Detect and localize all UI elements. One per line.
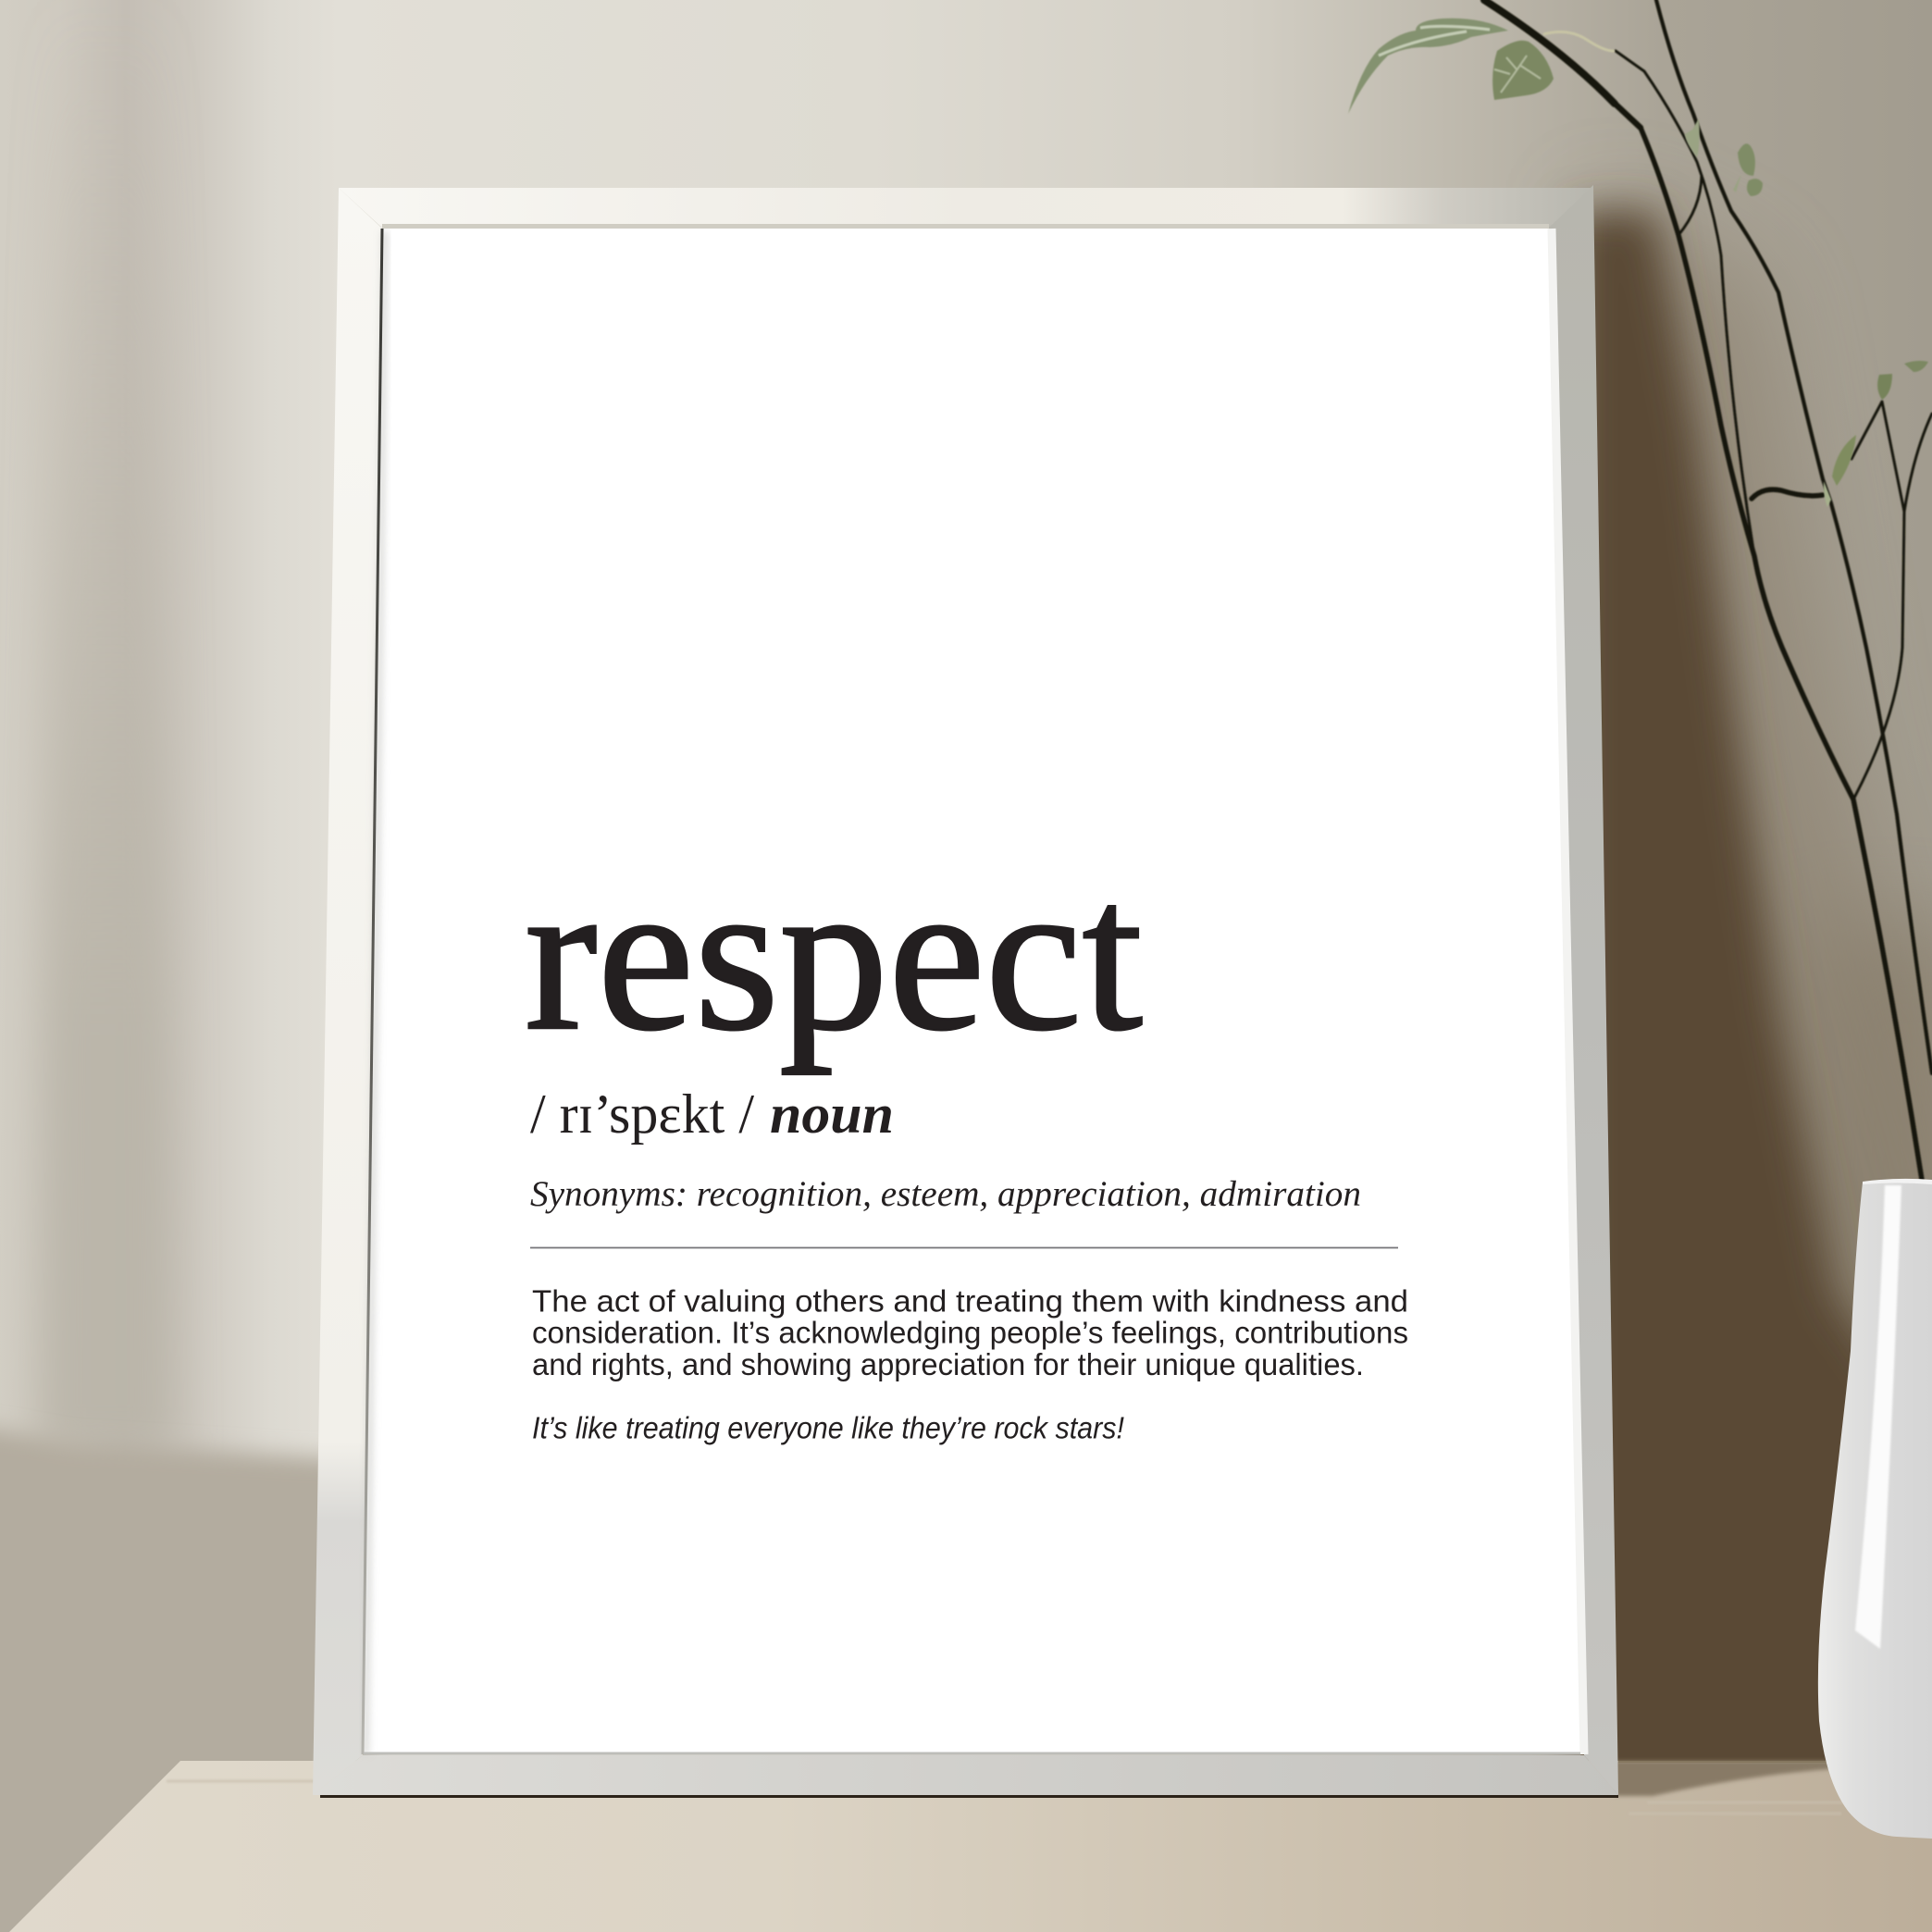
title: respect: respect [525,835,1143,1075]
frame: top bar [339,188,1593,228]
white vase [1818,1179,1932,1839]
part of speech: noun [770,1084,894,1145]
definition paragraph: The act of valuing others and treating them with kindness and [532,1284,1408,1318]
divider rule [530,1247,1398,1248]
definition paragraph [532,1284,1408,1381]
pale leaf stalk [1543,32,1615,51]
plant stems [1484,0,1932,1180]
frame: left bar [313,188,382,1795]
printed paper with text [362,229,1584,1754]
vase highlight [1855,1185,1901,1649]
white paper [362,229,1582,1754]
tabletop [9,1761,1932,1932]
pronunciation: / rɪ’spɛkt / [530,1084,754,1145]
definition paragraph: consideration. It’s acknowledging people’s feelings, contributions [532,1316,1408,1349]
twig leaves [1832,435,1856,486]
frame: bottom bar [313,1755,1618,1795]
plant leaves [1348,19,1928,507]
small pale leaf [1685,118,1700,157]
picture frame [313,185,1618,1798]
long trailing leaf [1348,19,1508,114]
frame contact shadow [320,1794,1618,1798]
vase body [1818,1180,1932,1839]
inner lip [382,224,1549,229]
synonyms: Synonyms: recognition, esteem, appreciation, admiration [530,1174,1361,1214]
italic tagline: It’s like treating everyone like they’re rock stars! [532,1410,1124,1445]
small paired leaf [1738,143,1755,176]
frame: right bar [1549,185,1618,1795]
definition paragraph: and rights, and showing appreciation for their unique qualities. [532,1347,1364,1381]
round leaf [1492,41,1554,100]
vase rim [1863,1179,1932,1184]
